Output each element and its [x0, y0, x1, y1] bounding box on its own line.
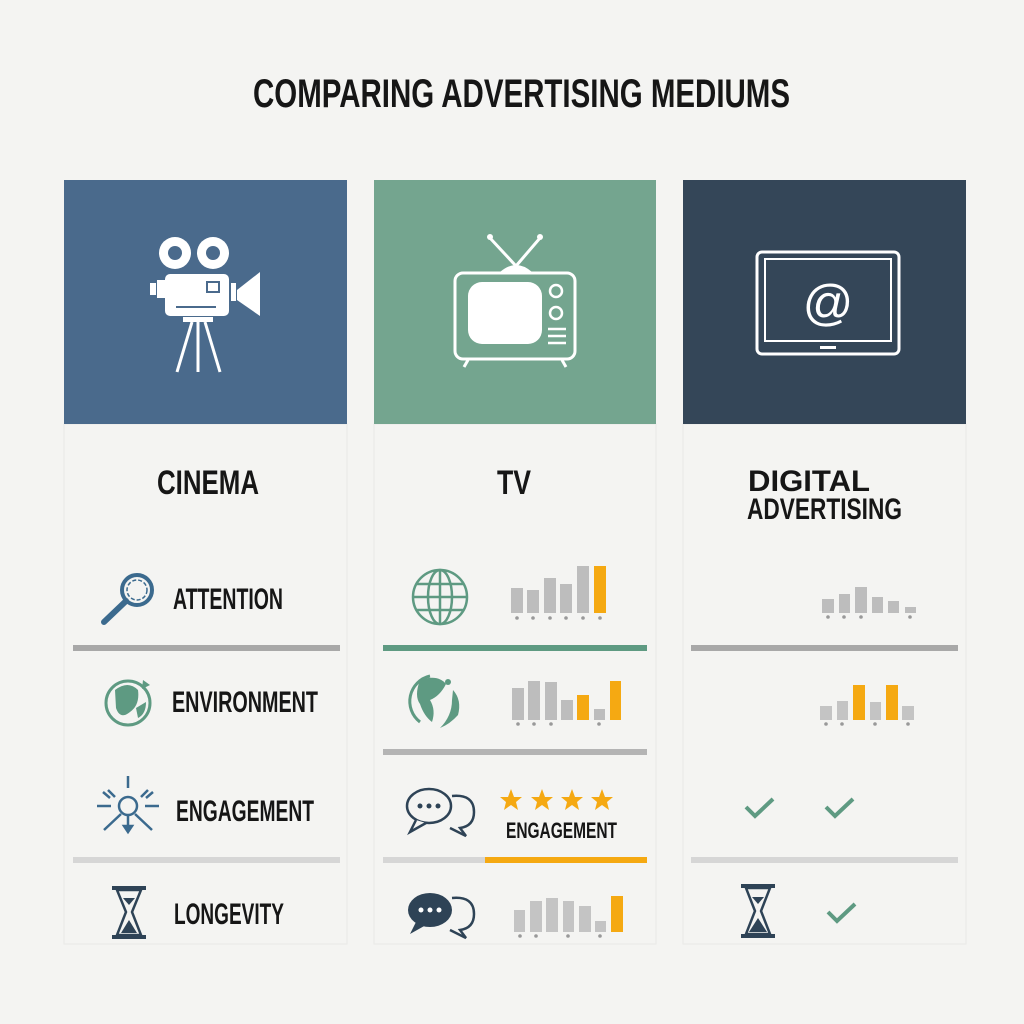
heading: tv: TV — [497, 464, 531, 502]
bar chart: tv environment — [512, 681, 621, 726]
heading: digital advertising: ADVERTISING — [747, 493, 902, 526]
bar chart: tv longevity — [514, 896, 623, 938]
icon: eco globe — [106, 680, 150, 725]
icon: film camera — [150, 237, 260, 372]
row: longevity: LONGEVITY — [174, 898, 284, 931]
icon: monitor with at sign: @ — [803, 275, 853, 331]
row: engagement — [97, 776, 853, 843]
stars — [500, 789, 613, 810]
icon: monitor with at sign — [757, 252, 899, 354]
row: longevity — [112, 884, 855, 939]
icon: hourglass — [112, 886, 146, 939]
row: environment: ENVIRONMENT — [172, 686, 318, 719]
dividers row 1 — [73, 645, 340, 651]
icon: magnifier — [104, 575, 152, 622]
icon: speech bubbles filled — [408, 893, 474, 938]
heading: cinema: CINEMA — [157, 464, 259, 502]
row: engagement: ENGAGEMENT — [176, 795, 314, 828]
heading: digital advertising: DIGITAL — [748, 465, 870, 498]
checkmark digital longevity — [828, 904, 855, 921]
icon: speech bubbles outline — [407, 789, 474, 836]
row: engagement: ENGAGEMENT — [506, 818, 617, 843]
column outlines — [64, 424, 966, 944]
heading: digital advertising — [747, 465, 902, 526]
divider row 2 — [383, 749, 647, 755]
panel: digital — [683, 180, 966, 424]
row: attention: ATTENTION — [173, 583, 283, 616]
panel: tv — [374, 180, 656, 424]
dividers row 3 — [73, 857, 340, 863]
bar chart: tv attention — [511, 566, 606, 620]
row: environment — [106, 676, 914, 728]
icon: hourglass digital — [741, 884, 775, 938]
title: COMPARING ADVERTISING MEDIUMS — [253, 72, 790, 116]
panel: cinema — [64, 180, 347, 424]
icon: idea bulb — [97, 776, 159, 832]
icon: television — [455, 234, 575, 367]
bar chart: digital attention — [822, 587, 916, 619]
checkmarks digital — [746, 799, 853, 816]
icon: earth — [410, 676, 459, 728]
icon: globe grid — [413, 570, 467, 624]
row: attention — [104, 566, 916, 624]
bar chart: digital environment — [820, 685, 914, 726]
